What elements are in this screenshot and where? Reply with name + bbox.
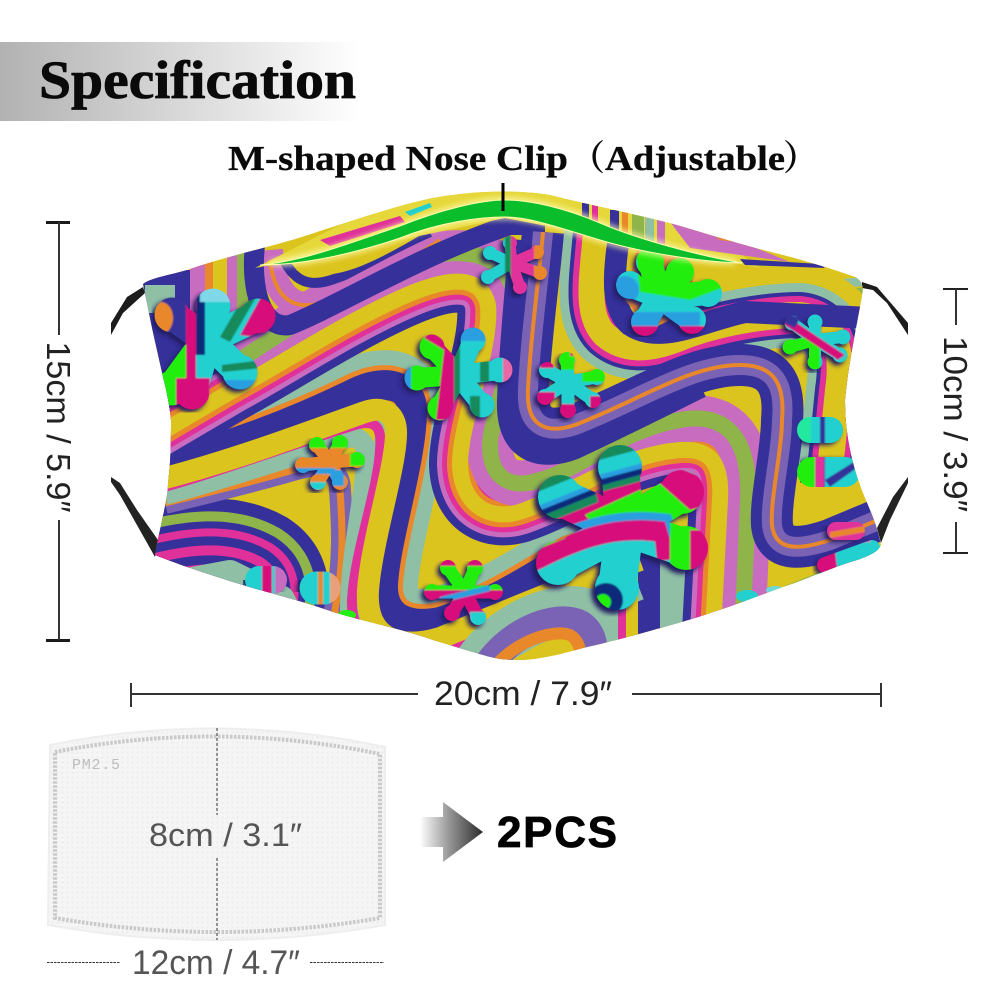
dimension: mask width 20cm: 20cm / 7.9″: [434, 675, 612, 713]
flower: bottom left partial: [243, 566, 340, 604]
band family: big navy wave with orange pinstripe: [510, 232, 890, 600]
flower: lower middle small: [422, 558, 507, 628]
nose clip label: M-shaped Nose Clip: [228, 139, 568, 178]
filter width dimension: 12cm / 4.7″: [132, 944, 300, 982]
dimension: mask side height 10cm: 10cm / 3.9″: [937, 336, 974, 512]
flower: centre left: [399, 328, 512, 425]
quantity label: 2PCS: [497, 808, 617, 857]
band family: top right U: [560, 230, 863, 485]
fabric above nose clip: [255, 185, 825, 268]
nose clip label: （: [570, 139, 605, 178]
nose clip label: Adjustable: [605, 139, 785, 178]
band family: top left U under nose clip: [254, 225, 545, 325]
face mask with wavy psychedelic pattern: [143, 192, 881, 660]
M-shaped nose clip: [260, 200, 742, 265]
flower: small centre right: [535, 348, 610, 420]
dimension: mask height 15cm: [40, 221, 77, 642]
band family: lower left loop: [140, 550, 300, 640]
nose clip label: ）: [783, 139, 818, 178]
flower: top right large: [611, 250, 722, 337]
ear strap: top right: [862, 282, 908, 335]
header band: Specification: [0, 42, 360, 121]
dimension: mask height 15cm: 15cm / 5.9″: [40, 342, 77, 513]
nose clip label: [228, 139, 818, 178]
top left corner fabric: [143, 251, 250, 420]
band family: bottom centre hump: [470, 611, 607, 690]
PM2.5 mark: PM2.5: [72, 757, 120, 774]
flower: right middle partial: [797, 417, 858, 487]
small petals along bottom edge: [338, 586, 784, 620]
ear strap: lower left: [111, 477, 158, 557]
flower: right lower partial: [812, 522, 880, 574]
filter height guide: [216, 728, 218, 940]
flower: right upper small: [780, 310, 855, 372]
filter height text: 8cm / 3.1″: [149, 817, 302, 853]
nose clip pointer line: [502, 183, 504, 211]
arrow: [420, 802, 483, 862]
filter insert: [48, 728, 385, 940]
band family: large left wave: [150, 385, 652, 670]
flower: under nose clip centre: [478, 233, 550, 295]
flower: large left: [152, 288, 276, 412]
band family: central S wave: [140, 253, 748, 660]
flower: left small orange: [292, 432, 367, 492]
flower: big lower centre: [528, 445, 708, 616]
ear strap: top left: [111, 287, 145, 335]
ear strap: lower right: [877, 477, 908, 543]
header band: Specification: Specification: [39, 50, 356, 110]
